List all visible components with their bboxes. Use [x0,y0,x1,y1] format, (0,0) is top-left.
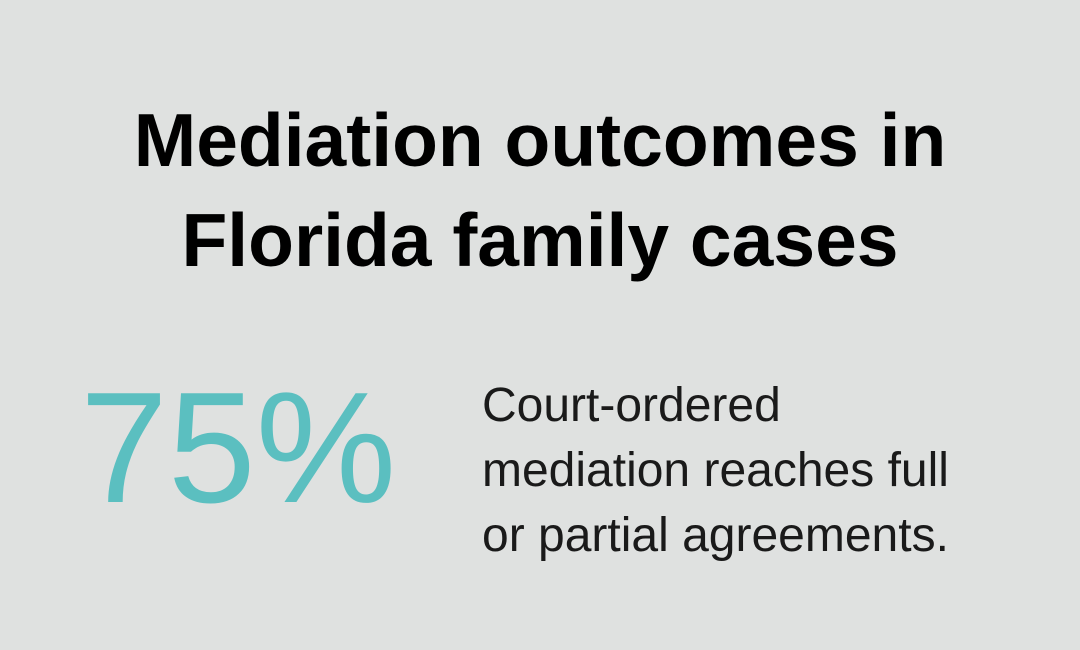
stat: 75%: 75% [80,360,396,536]
description text: or partial agreements. [482,509,949,562]
description text: mediation reaches full [482,444,949,497]
description text [482,379,949,562]
description text: Court-ordered [482,379,781,432]
title: Mediation outcomes in [134,98,946,182]
title [134,98,946,282]
title: Florida family cases [181,198,898,282]
